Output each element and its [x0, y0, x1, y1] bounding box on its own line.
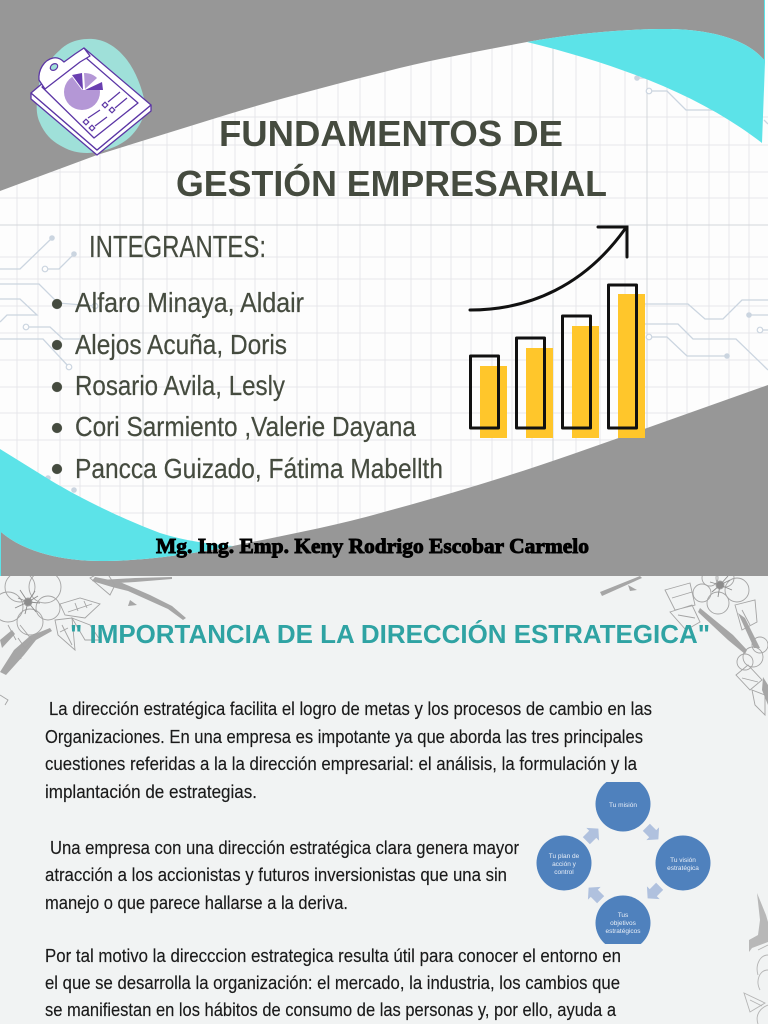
list of team members: Alejos Acuña, Doris	[75, 329, 287, 360]
body text: paragraph 3: se manifiestan en los hábitos de consumo de las personas y, por ello, ayuda a	[45, 999, 617, 1020]
icon blob	[37, 39, 145, 153]
list of team members: Pancca Guizado, Fátima Mabellth	[75, 453, 443, 484]
body text: paragraph 3: el que se desarrolla la organización: el mercado, la industria, los cambios que	[45, 972, 620, 993]
body text: paragraph 3: Por tal motivo la direcccion estrategica resulta útil para conocer el entorno en	[45, 945, 621, 966]
cycle diagram: acción y	[552, 861, 577, 868]
arrow	[470, 227, 627, 310]
top gray wave	[0, 0, 764, 191]
body text: paragraph 1	[45, 698, 652, 802]
bar chart with rising arrow	[470, 227, 645, 438]
title	[176, 113, 607, 204]
floral decoration: top right	[600, 569, 768, 715]
heading: integrantes: INTEGRANTES:	[89, 229, 266, 264]
body text: paragraph 2: manejo o que parece hallarse a la deriva.	[45, 892, 348, 913]
icon: clipboard with pie chart	[31, 39, 151, 155]
advisor name: Mg. Ing. Emp. Keny Rodrigo Escobar Carmelo	[156, 534, 589, 558]
floral decoration: bottom right	[744, 893, 768, 1024]
bottom cyan wave	[0, 449, 233, 576]
list of team members	[52, 287, 443, 484]
cycle diagram	[536, 776, 710, 950]
list of team members: Rosario Avila, Lesly	[75, 370, 285, 401]
title: GESTIÓN EMPRESARIAL	[176, 162, 607, 204]
top cyan wave	[527, 0, 765, 143]
body text: paragraph 1: implantación de estrategias.	[45, 781, 257, 802]
body text: paragraph 2	[45, 837, 519, 913]
body text: paragraph 3	[45, 945, 621, 1020]
cycle diagram: Tu misión	[609, 802, 637, 809]
cycle diagram: objetivos	[610, 920, 637, 927]
panel: cover page background	[0, 29, 768, 546]
cycle diagram: estratégica	[667, 865, 699, 872]
title: FUNDAMENTOS DE	[219, 113, 563, 154]
cycle diagram: control	[554, 869, 574, 876]
heading: " IMPORTANCIA DE LA DIRECCIÓN ESTRATEGICA"	[70, 619, 710, 649]
panel: importance of strategic direction	[0, 569, 768, 1024]
body text: paragraph 1: La dirección estratégica facilita el logro de metas y los procesos de cambio en las	[49, 698, 652, 719]
cycle diagram: Tus	[618, 912, 629, 919]
cycle diagram: Tu plan de	[549, 853, 580, 860]
body text: paragraph 1: Organizaciones. En una empresa es impotante ya que aborda las tres principales	[45, 726, 643, 747]
body text: paragraph 2: atracción a los accionistas y futuros inversionistas que una sin	[45, 864, 507, 885]
bottom gray wave	[1, 385, 768, 576]
body text: paragraph 2: Una empresa con una dirección estratégica clara genera mayor	[50, 837, 519, 858]
list of team members: Alfaro Minaya, Aldair	[75, 287, 304, 318]
cycle diagram: Tu visión	[670, 857, 696, 864]
cycle diagram: estratégicos	[605, 928, 641, 935]
body text: paragraph 1: cuestiones referidas a la la dirección empresarial: el análisis, la formulación y la	[45, 753, 638, 774]
floral decoration: top left	[0, 570, 186, 705]
list of team members: Cori Sarmiento ,Valerie Dayana	[75, 411, 417, 442]
